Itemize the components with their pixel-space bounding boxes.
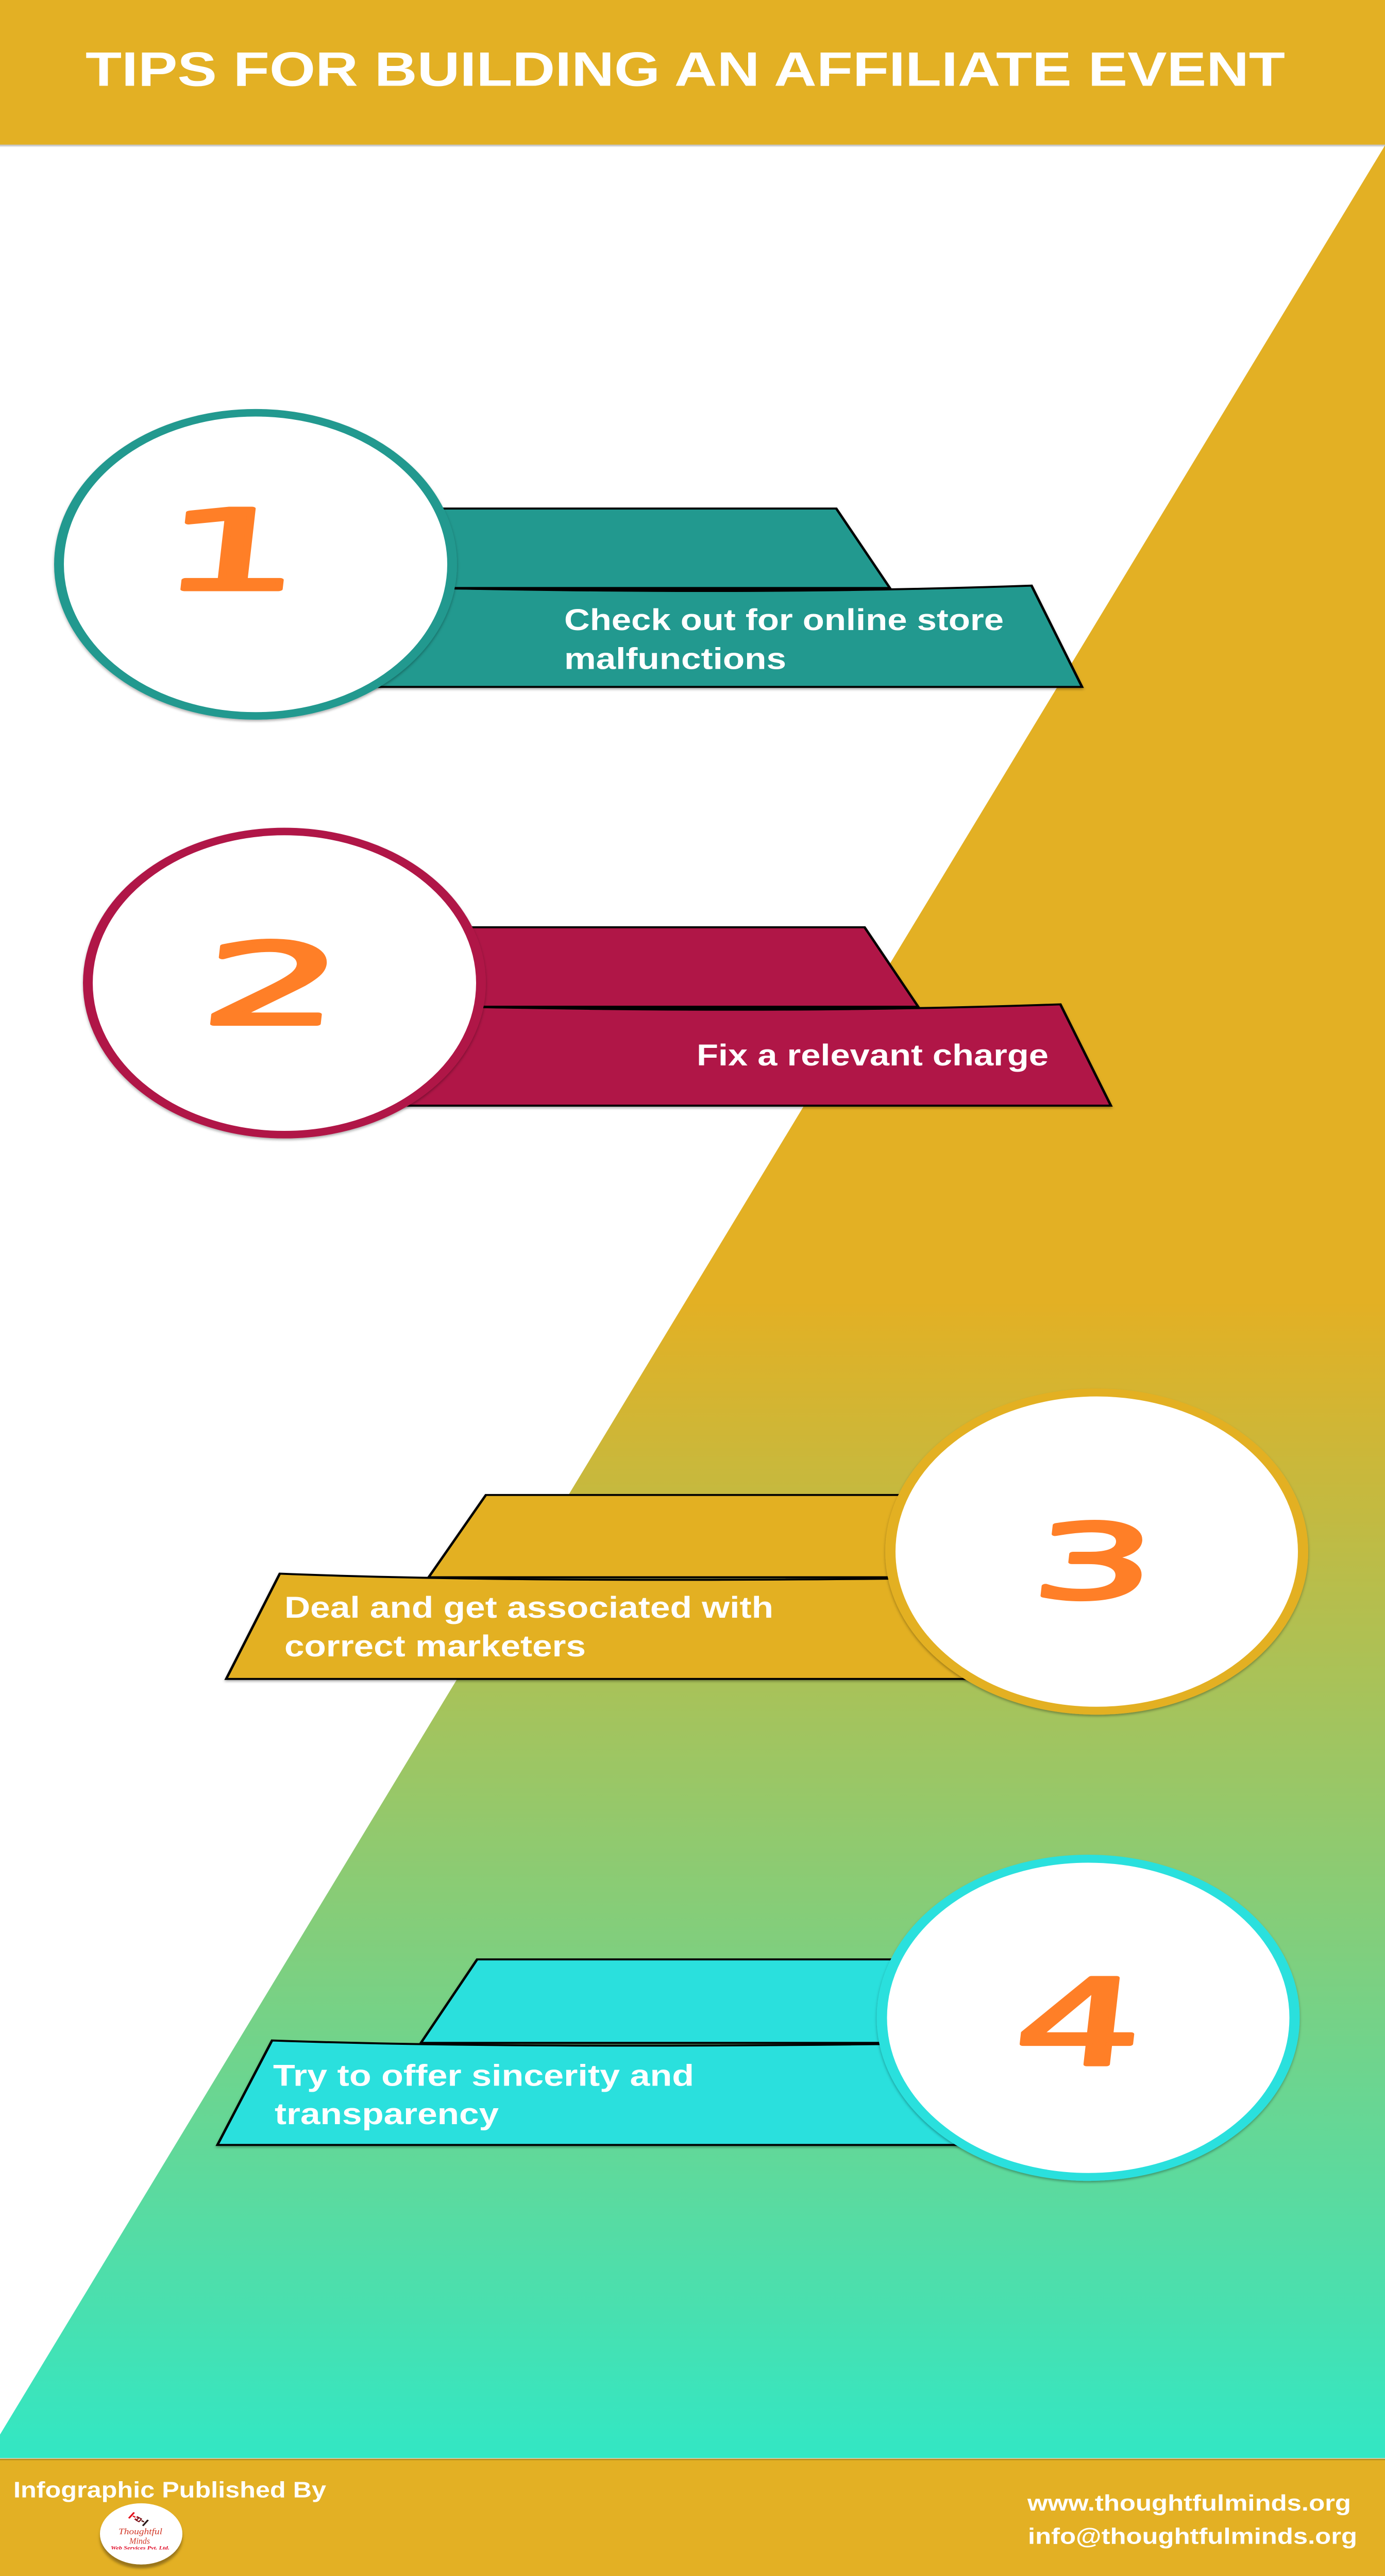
publisher label: Infographic Published By xyxy=(13,2477,327,2502)
tip 1 ribbon xyxy=(361,509,1082,687)
tip 3 xyxy=(226,1393,1303,1710)
tip 1 text: Check out for online store xyxy=(564,603,1004,637)
tip 2 badge xyxy=(88,832,481,1134)
tip 3 number: 3 xyxy=(1027,1503,1161,1622)
logo wordmark: Thoughtful xyxy=(119,2527,163,2536)
logo wordmark: Web Services Pvt. Ltd. xyxy=(111,2546,170,2551)
header band xyxy=(0,0,1385,145)
tip 4 ribbon xyxy=(217,1959,1005,2145)
tip 2 ribbon xyxy=(390,927,1111,1106)
tip 4 text xyxy=(273,2059,694,2131)
tip 3 text: Deal and get associated with xyxy=(284,1591,773,1624)
tip 3 text: correct marketers xyxy=(284,1630,586,1663)
tip 1 text xyxy=(564,603,1004,676)
tip 4 badge xyxy=(882,1859,1294,2177)
tip 4 text: Try to offer sincerity and xyxy=(273,2059,694,2092)
tip 3 ribbon xyxy=(226,1495,1005,1679)
logo wordmark: Minds xyxy=(129,2536,150,2546)
tip 2 number: 2 xyxy=(195,920,351,1050)
publisher logo xyxy=(100,2503,182,2565)
tip 3 badge xyxy=(890,1393,1303,1710)
logo mark xyxy=(128,2512,149,2526)
tip 4 number: 4 xyxy=(1008,1954,1151,2092)
logo wordmark xyxy=(111,2527,170,2551)
header shadow xyxy=(0,145,1385,147)
tip 2 text: Fix a relevant charge xyxy=(697,1039,1049,1072)
title: TIPS FOR BUILDING AN AFFILIATE EVENT xyxy=(86,42,1285,96)
tip 1 number: 1 xyxy=(154,487,311,615)
tip 3 text xyxy=(284,1591,773,1663)
footer band xyxy=(0,2458,1385,2576)
tip 4 xyxy=(217,1859,1294,2177)
tip 1 xyxy=(59,413,1082,716)
contact website: www.thoughtfulminds.org xyxy=(1027,2490,1351,2515)
tip 1 text: malfunctions xyxy=(564,642,786,676)
tip 1 badge xyxy=(59,413,452,716)
tip 2 xyxy=(88,832,1111,1134)
tip 4 text: transparency xyxy=(275,2097,499,2131)
